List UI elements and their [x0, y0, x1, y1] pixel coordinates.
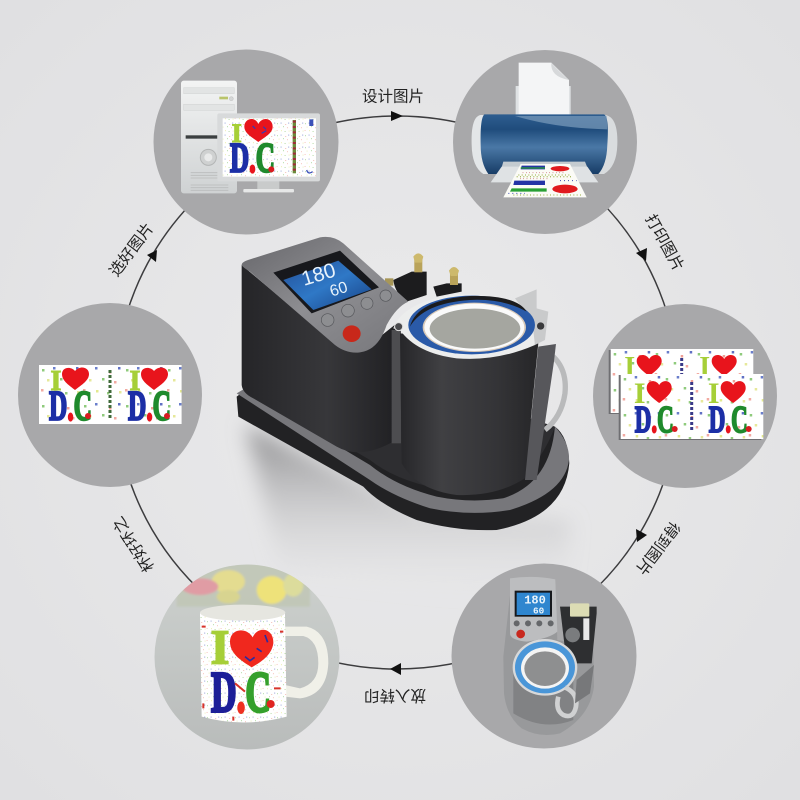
back sheet: I [699, 352, 710, 383]
artwork: double image: I [51, 366, 61, 397]
heating cylinder [392, 289, 565, 495]
control tower: 180 [299, 259, 338, 291]
LCD display [273, 251, 379, 313]
control tower [242, 237, 408, 452]
front sheet: I [634, 377, 646, 410]
arrow: right upper [636, 248, 647, 261]
label: put into press: 放入转印 [364, 686, 426, 704]
panel: computer step [154, 50, 338, 234]
panel: finished mug step [154, 563, 340, 750]
front sheet: D.C [709, 399, 748, 441]
machine reflection [246, 425, 570, 600]
back sheet: I [624, 352, 635, 383]
front sheet: I [708, 377, 720, 410]
icon: mug: D.C [211, 660, 271, 725]
icon: press top view: 180 [524, 593, 546, 607]
label: design image: 设计图片 [362, 88, 424, 106]
fittings [385, 253, 462, 302]
cylinder top rim [393, 294, 535, 359]
icon: mug [200, 605, 328, 725]
label: print image: 打印图片 [642, 211, 687, 274]
front sheet: D.C [635, 399, 674, 441]
label: get image: 得到图片 [632, 518, 683, 578]
icon: press top view: 60 [533, 605, 545, 616]
arrow: left upper [147, 250, 157, 262]
mug artwork [230, 630, 273, 667]
front sheet [619, 374, 763, 441]
artwork: double image: I [130, 366, 140, 397]
artwork: double image: D.C [49, 384, 92, 430]
artwork: double image [39, 365, 182, 430]
clamp tab [515, 289, 548, 345]
back sheet [609, 349, 753, 414]
arrow: top [391, 111, 403, 121]
artwork: double image: D.C [128, 384, 171, 430]
icon: computer [181, 81, 320, 193]
machine base [237, 387, 569, 530]
arrow: right lower [636, 529, 647, 542]
monitor artwork: I [232, 119, 242, 148]
label: finished mug: 杯好环之 [109, 513, 158, 575]
flowers backdrop [177, 563, 310, 607]
icon: press top view [503, 577, 597, 735]
panel: transfer sheets step [593, 304, 777, 488]
process ring [115, 116, 679, 669]
icon: mug: I [211, 621, 229, 674]
arrow: bottom [390, 663, 401, 675]
monitor artwork: D.C [230, 135, 275, 182]
clamp bar [525, 344, 556, 480]
printed sheet [503, 164, 587, 197]
machine: mug press [237, 237, 569, 530]
icon: printer [472, 63, 617, 197]
stop button [343, 325, 361, 342]
label: choose image: 选好图片 [106, 220, 157, 280]
panel: press top view step [452, 564, 636, 748]
monitor artwork [230, 119, 314, 174]
mug handle [545, 357, 565, 430]
panel: selected image step [18, 303, 202, 487]
panel: printer step [453, 50, 637, 234]
control tower: 60 [328, 279, 350, 300]
